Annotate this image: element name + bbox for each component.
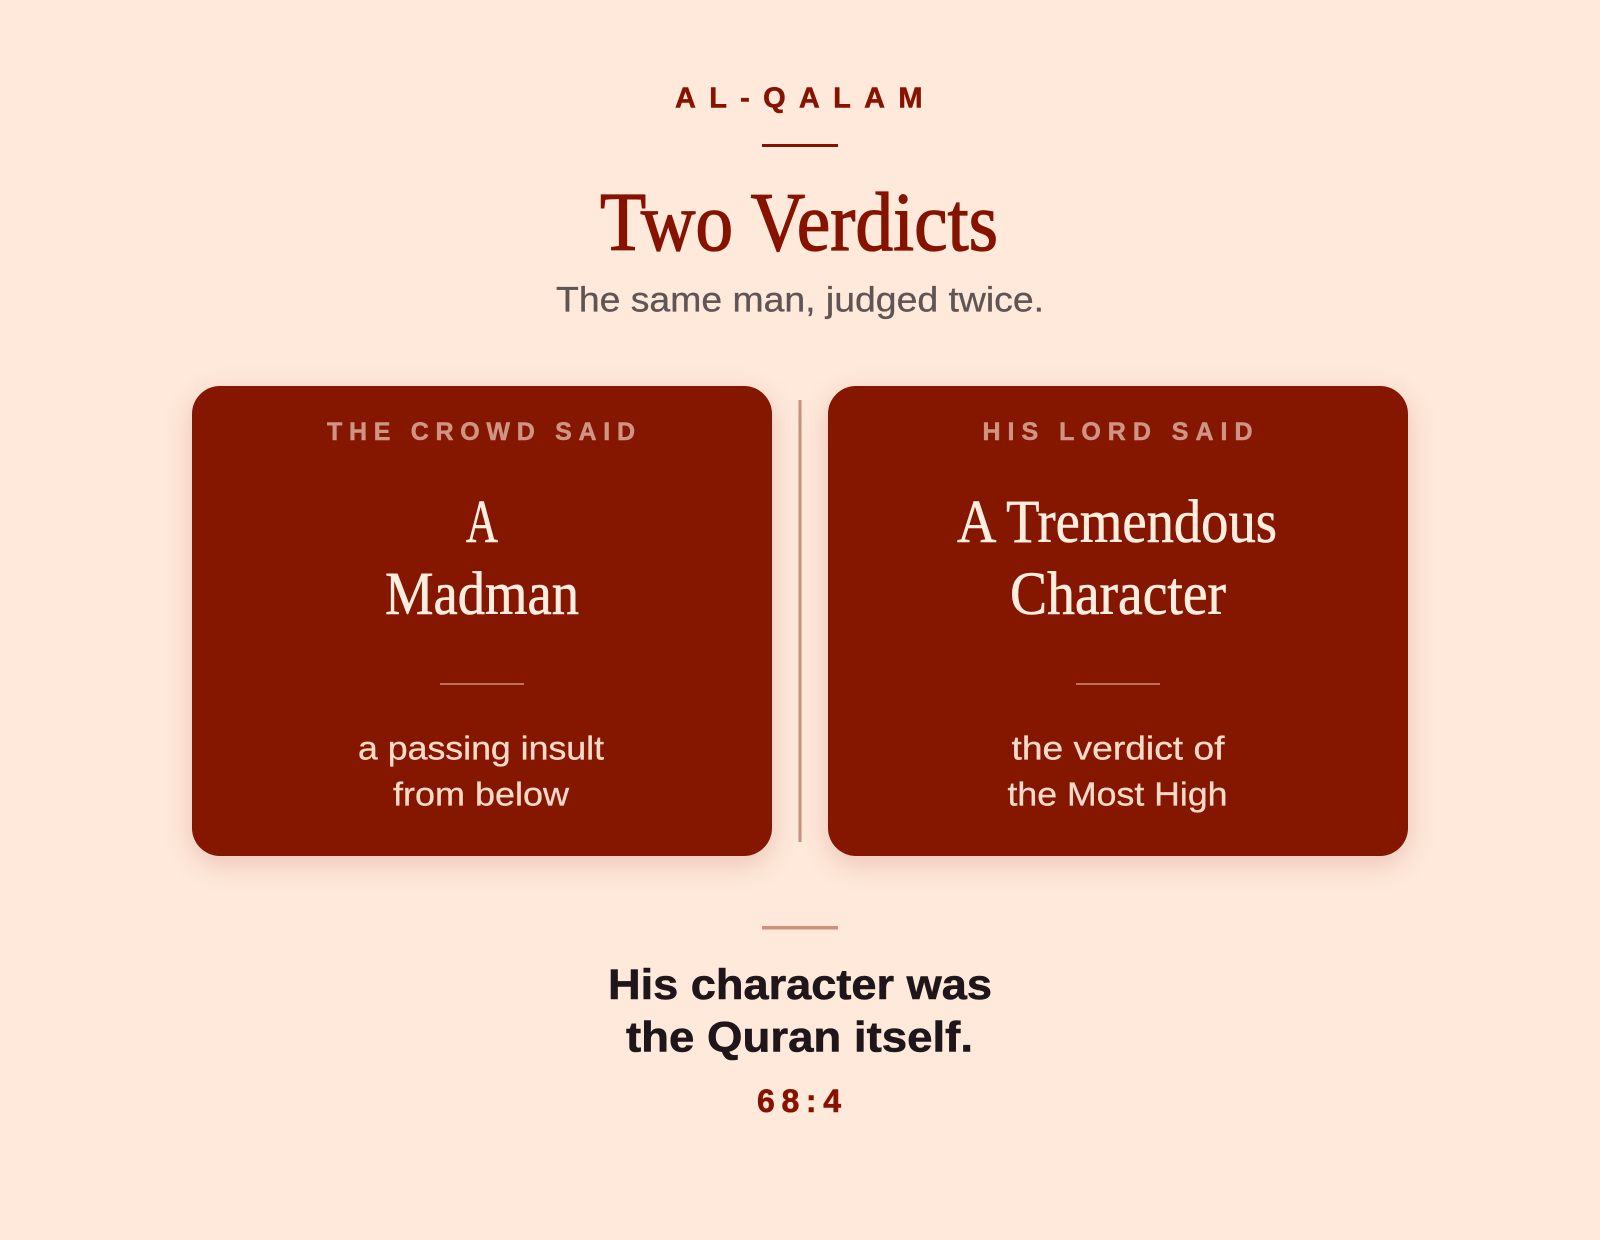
panel: the crowd said xyxy=(192,386,772,856)
card label: HIS LORD SAID xyxy=(982,418,1252,446)
eyebrow: surah name: AL-QALAM xyxy=(675,82,922,114)
footer rule xyxy=(762,926,838,930)
subtitle: The same man, judged twice. xyxy=(556,280,1044,320)
closing statement xyxy=(608,961,992,1062)
verdict note: from below xyxy=(393,776,569,812)
verdict: a madman: Madman xyxy=(385,561,579,628)
verdict: a madman: A xyxy=(466,489,498,556)
verdict: a madman xyxy=(385,489,579,628)
card background xyxy=(192,386,772,856)
verdict: a tremendous character: Character xyxy=(1010,561,1226,628)
footer xyxy=(608,926,992,1119)
header xyxy=(556,82,1044,320)
verdict: a tremendous character: A Tremendous xyxy=(957,489,1277,556)
verdict note xyxy=(1008,730,1228,812)
card background xyxy=(828,386,1408,856)
header rule xyxy=(762,144,838,147)
verdict note xyxy=(358,730,604,812)
verdict note: a passing insult xyxy=(358,730,604,766)
verdict: a tremendous character xyxy=(957,489,1277,628)
verdict note: the verdict of xyxy=(1012,730,1225,766)
card rule xyxy=(440,683,524,685)
verdict note: the Most High xyxy=(1008,776,1228,812)
card rule xyxy=(1076,683,1160,685)
citation: 68:4 xyxy=(757,1083,841,1119)
closing statement: the Quran itself. xyxy=(626,1014,973,1062)
title: Two Verdicts xyxy=(600,176,998,269)
card label: THE CROWD SAID xyxy=(327,418,635,446)
closing statement: His character was xyxy=(608,961,992,1009)
center divider xyxy=(798,400,802,842)
panel: his lord said xyxy=(828,386,1408,856)
